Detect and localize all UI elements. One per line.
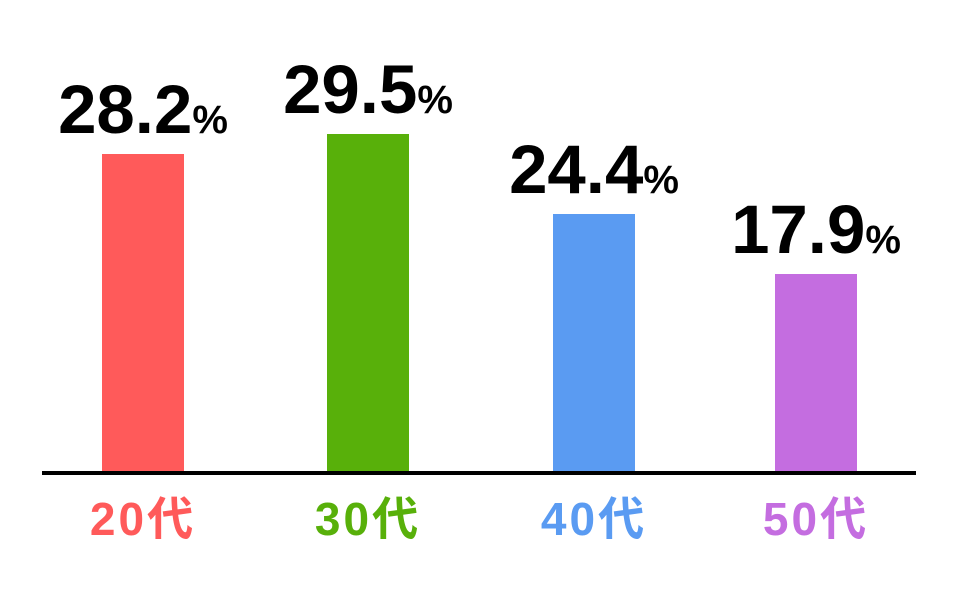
label: 40代: 40代 bbox=[541, 493, 647, 545]
bar: 40代 bbox=[553, 214, 635, 473]
value: 29.5%: 29.5% bbox=[283, 51, 453, 128]
label: 30代: 30代 bbox=[315, 493, 421, 545]
label: 50代: 50代 bbox=[763, 493, 869, 545]
label: 20代: 20代 bbox=[90, 493, 196, 545]
value: 24.4%: 24.4% bbox=[509, 131, 679, 208]
value: 17.9%: 17.9% bbox=[731, 191, 901, 268]
bar: 50代 bbox=[775, 274, 857, 473]
value: 28.2%: 28.2% bbox=[58, 71, 228, 148]
bar: 20代 bbox=[102, 154, 184, 473]
bar: 30代 bbox=[327, 134, 409, 473]
axis baseline bbox=[42, 471, 916, 475]
